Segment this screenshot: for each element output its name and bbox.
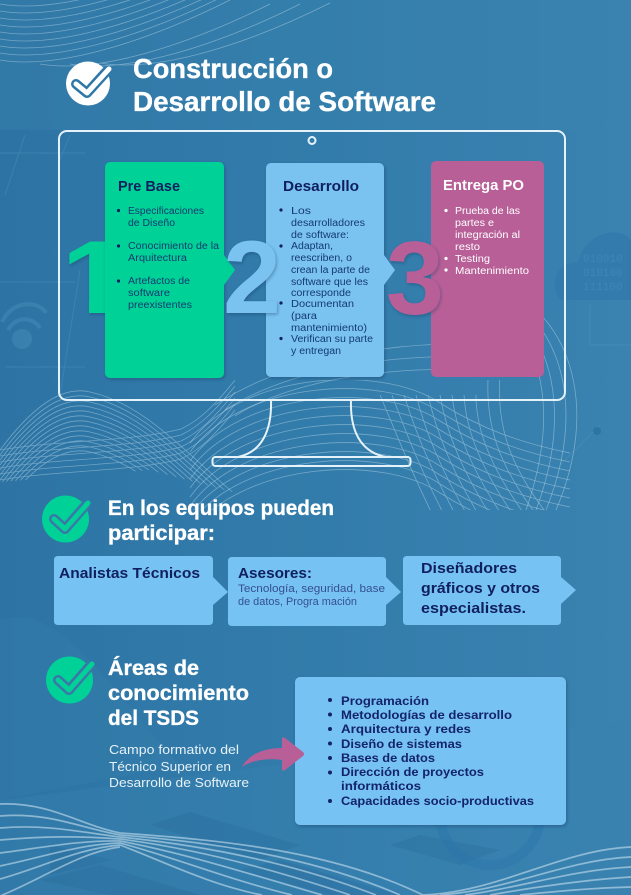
- list: desarrollo: Documentan: [291, 299, 354, 310]
- list: pre base: Especificaciones: [128, 206, 204, 217]
- card: asesores: Tecnología, seguridad, base: [238, 583, 385, 595]
- number 3: 3: [386, 221, 444, 337]
- list: desarrollo: Verifican su parte: [291, 334, 373, 345]
- heading: teams: participar:: [108, 522, 215, 545]
- panel: areas list: Diseño de sistemas: [341, 737, 462, 751]
- icon: cloud watermark: 010100: [583, 268, 623, 280]
- bottom wave lines: [0, 804, 631, 895]
- title: Desarrollo de Software: [133, 86, 436, 117]
- monitor illustration: [59, 131, 565, 466]
- list: entrega PO: Prueba de las: [455, 206, 520, 217]
- heading: teams: [108, 497, 334, 545]
- list: pre base: Artefactos de: [128, 276, 190, 287]
- icon: cloud watermark: [554, 232, 631, 300]
- icon: white check badge: [66, 62, 110, 106]
- heading: desarrollo: Desarrollo: [283, 179, 359, 195]
- list: desarrollo: y entregan: [291, 346, 341, 357]
- panel: areas list: Bases de datos: [341, 751, 435, 765]
- list: pre base: [117, 206, 219, 311]
- text block: campo formativo: Campo formativo del: [109, 743, 239, 757]
- panel: desarrollo: [266, 163, 395, 377]
- list: desarrollo: crean la parte de: [291, 265, 370, 276]
- number 1: 1: [61, 219, 128, 335]
- title: Construcción o: [133, 53, 333, 84]
- list: desarrollo: desarrolladores: [291, 218, 365, 229]
- icon: cloud watermark: 111100: [583, 282, 623, 294]
- icon: wifi watermark: [2, 304, 46, 349]
- list: pre base: de Diseño: [128, 218, 175, 229]
- heading: teams: En los equipos pueden: [108, 497, 334, 520]
- card: asesores: [228, 557, 401, 626]
- middle left ribbon: [0, 380, 236, 492]
- mesh lines: [190, 380, 570, 510]
- card: asesores: Asesores:: [238, 565, 312, 582]
- panel: entrega PO: [431, 161, 544, 377]
- list: entrega PO: Testing: [455, 254, 490, 265]
- list: pre base: software: [128, 288, 170, 299]
- list: desarrollo: software que les: [291, 277, 368, 288]
- panel: areas list: Arquitectura y redes: [341, 722, 471, 736]
- panel: areas list: Metodologías de desarrollo: [341, 708, 512, 722]
- card: diseñadores: Diseñadores: [421, 560, 517, 577]
- list: entrega PO: Mantenimiento: [455, 266, 529, 277]
- heading: entrega PO: Entrega PO: [443, 178, 524, 194]
- card: diseñadores: especialistas.: [421, 600, 526, 617]
- list: desarrollo: (para: [291, 311, 317, 322]
- list: desarrollo: Los: [291, 206, 311, 217]
- list: pre base: preexistentes: [128, 300, 192, 311]
- panel: pre base: [105, 162, 235, 378]
- card: diseñadores: gráficos y otros: [421, 580, 540, 597]
- top left wave lines: [0, 0, 330, 66]
- heading: areas: Áreas de: [108, 657, 199, 680]
- text block: campo formativo: Técnico Superior en: [109, 760, 231, 774]
- heading: areas: del TSDS: [108, 707, 199, 730]
- icon: cloud watermark: 010010: [583, 254, 623, 266]
- title: [133, 53, 436, 117]
- heading: pre base: Pre Base: [118, 179, 180, 195]
- number 2: 2: [223, 220, 281, 336]
- card: diseñadores: [403, 556, 576, 625]
- heading: areas: [108, 657, 249, 730]
- list: desarrollo: mantenimiento): [291, 323, 367, 334]
- list: entrega PO: [444, 206, 529, 277]
- list: desarrollo: corresponde: [291, 288, 351, 299]
- arrow: curved pink: [242, 737, 304, 771]
- card: asesores: de datos, Progra mación: [238, 596, 357, 608]
- list: desarrollo: Adaptan,: [291, 241, 333, 252]
- list: desarrollo: reescriben, o: [291, 253, 352, 264]
- card: analistas técnicos: [54, 556, 228, 625]
- panel: areas list: Dirección de proyectos: [341, 765, 484, 779]
- list: desarrollo: de software:: [291, 230, 349, 241]
- concentric arcs: [215, 317, 577, 510]
- list: pre base: Conocimiento de la: [128, 241, 219, 252]
- list: entrega PO: partes e: [455, 218, 494, 229]
- panel: areas list: [295, 677, 566, 825]
- list: entrega PO: integración al: [455, 230, 520, 241]
- panel: areas list: informáticos: [341, 779, 421, 793]
- icon: green check badge areas: [46, 656, 93, 704]
- card: analistas técnicos: Analistas Técnicos: [59, 565, 200, 582]
- icon: green check badge teams: [42, 496, 89, 542]
- heading: areas: conocimiento: [108, 682, 249, 705]
- panel: areas list: Capacidades socio-productivas: [341, 794, 534, 808]
- panel: areas list: Programación: [341, 694, 429, 708]
- list: desarrollo: [279, 206, 373, 357]
- text block: campo formativo: [109, 743, 249, 790]
- list: pre base: Arquitectura: [128, 253, 187, 264]
- list: entrega PO: resto: [455, 242, 480, 253]
- text block: campo formativo: Desarrollo de Software: [109, 776, 249, 790]
